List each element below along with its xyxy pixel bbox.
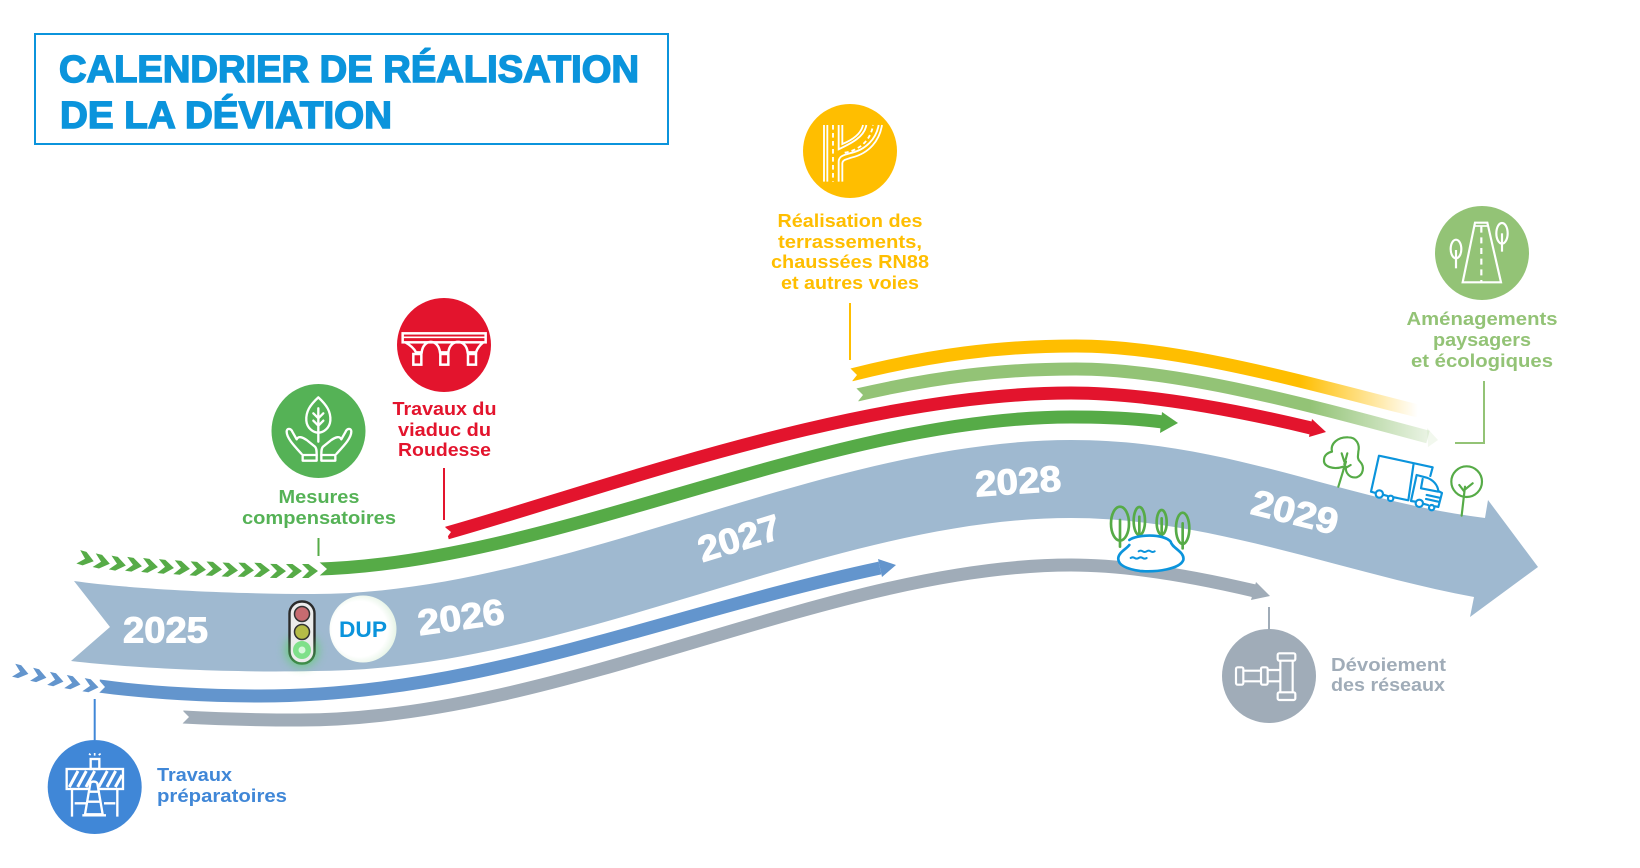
label: travaux préparatoires: préparatoires	[157, 786, 287, 806]
title box: CALENDRIER DE RÉALISATION	[59, 47, 639, 91]
label: terrassements: et autres voies	[781, 273, 919, 293]
circle icon: mesures compensatoires (hands and leaf)	[272, 384, 366, 478]
label: travaux du viaduc: Travaux du	[392, 399, 496, 419]
label: aménagements paysagers: paysagers	[1433, 330, 1531, 350]
year labels: 2028	[974, 458, 1062, 504]
label: travaux du viaduc	[392, 399, 496, 460]
label: travaux préparatoires: Travaux	[157, 765, 232, 785]
ribbon: terrassements (yellow)	[848, 346, 1418, 411]
year labels: 2025	[123, 610, 208, 650]
DUP milestone: DUP	[339, 617, 387, 642]
label: travaux préparatoires	[157, 765, 287, 806]
main timeline arrow band	[71, 440, 1538, 671]
label: mesures compensatoires	[242, 487, 396, 528]
circle icon: viaduc (bridge)	[397, 298, 491, 392]
circle icon: terrassements (road fork)	[803, 104, 897, 198]
year labels: 2029	[1247, 481, 1343, 543]
connector: dévoiement	[1268, 607, 1270, 630]
label: terrassements	[771, 211, 929, 293]
year labels: 2026	[415, 591, 507, 643]
label: mesures compensatoires: Mesures	[278, 487, 360, 507]
ribbon: viaduc (red)	[441, 393, 1326, 543]
ribbon: aménagements paysagers (light green)	[854, 369, 1438, 447]
label: dévoiement des réseaux	[1331, 655, 1446, 695]
ribbon: dévoiement des réseaux (grey)	[181, 565, 1270, 725]
DUP milestone	[330, 596, 396, 662]
icon: truck and trees	[1324, 437, 1482, 516]
connector: terrassements	[849, 303, 851, 360]
ribbon: travaux préparatoires (blue)	[97, 559, 896, 696]
title box: DE LA DÉVIATION	[60, 93, 392, 137]
label: aménagements paysagers: et écologiques	[1411, 351, 1553, 371]
connector: travaux préparatoires	[94, 699, 96, 740]
circle icon: travaux préparatoires (barrier and cone)	[48, 740, 142, 834]
circle icon: aménagements paysagers (road and trees)	[1435, 206, 1529, 300]
label: travaux du viaduc: Roudesse	[398, 440, 491, 460]
year labels	[123, 458, 1343, 650]
connector: aménagements paysagers	[1455, 381, 1484, 443]
label: terrassements: chaussées RN88	[771, 252, 929, 272]
chevrons: mesures compensatoires	[76, 550, 318, 578]
connector: mesures compensatoires	[318, 538, 320, 556]
circle icon: dévoiement des réseaux (pipes)	[1222, 629, 1316, 723]
label: terrassements: terrassements,	[778, 232, 922, 252]
ribbon: mesures compensatoires (green)	[318, 412, 1178, 577]
label: travaux du viaduc: viaduc du	[398, 420, 491, 440]
label: aménagements paysagers: Aménagements	[1406, 309, 1558, 329]
chevrons: travaux préparatoires	[12, 664, 100, 694]
title box	[35, 34, 668, 144]
label: terrassements: Réalisation des	[778, 211, 922, 231]
label: dévoiement des réseaux: Dévoiement	[1331, 655, 1446, 675]
label: mesures compensatoires: compensatoires	[242, 508, 396, 528]
label: aménagements paysagers	[1406, 309, 1558, 371]
label: dévoiement des réseaux: des réseaux	[1331, 675, 1445, 695]
connector: viaduc	[443, 468, 445, 520]
traffic light	[286, 602, 318, 666]
year labels: 2027	[693, 506, 785, 570]
icon: lake and trees	[1111, 507, 1189, 571]
